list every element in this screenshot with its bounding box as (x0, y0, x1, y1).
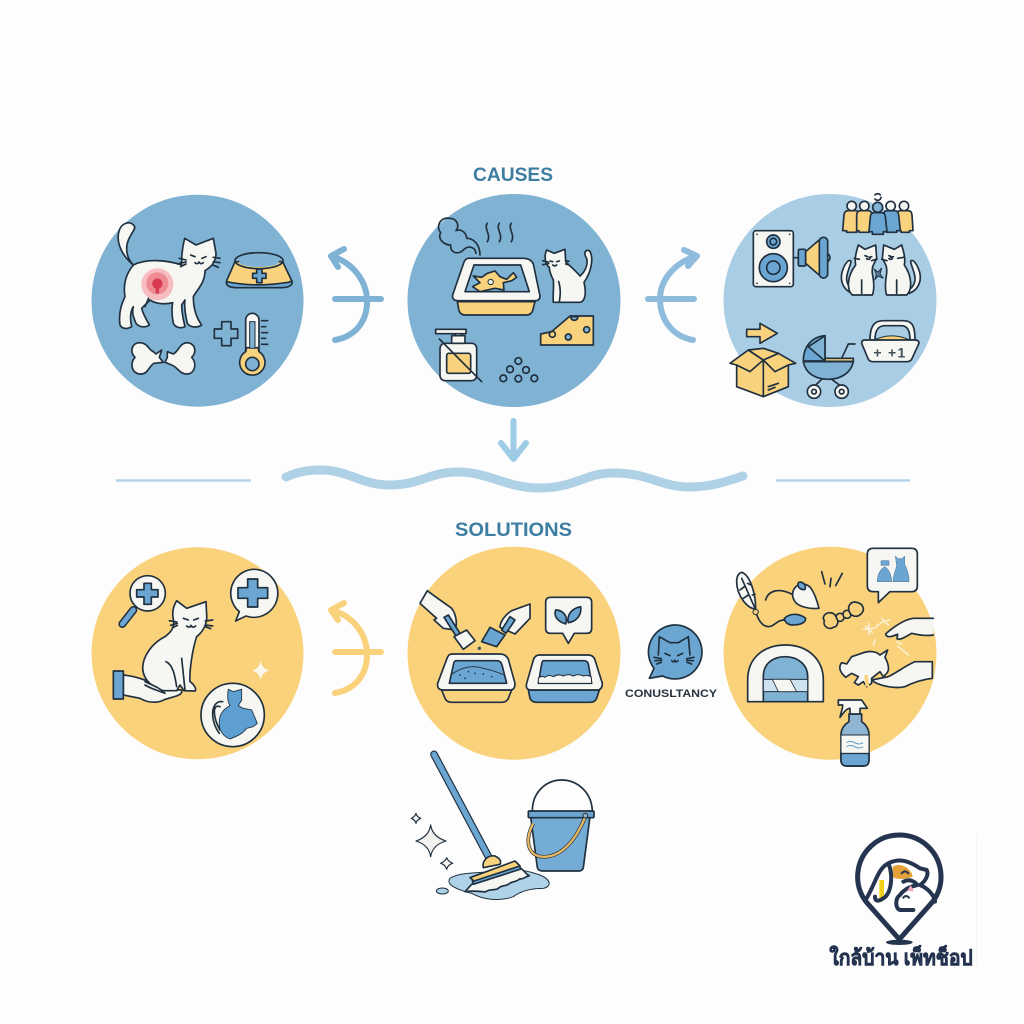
panel: veterinary solutions (92, 547, 304, 759)
logo: pet shop pin (829, 835, 977, 970)
icon: dirty litter box (453, 258, 540, 315)
icon: crowd of people (843, 194, 913, 234)
icon: bucket (528, 780, 594, 871)
icon: white toy mouse (766, 572, 842, 609)
arrow: solutions left (331, 603, 381, 693)
decorative: faint vertical edge (976, 835, 978, 965)
heading: solutions: SOLUTIONS (455, 520, 572, 541)
icon: cat on hand (840, 650, 932, 687)
divider: right line (776, 479, 910, 482)
icon: cheese (541, 316, 593, 345)
icon: speech bubble with leaf (546, 597, 592, 643)
icon: speech bubble with cross (231, 569, 278, 621)
panel: environment solutions (724, 547, 936, 766)
divider: left line (116, 479, 251, 482)
panel: stress causes (724, 194, 936, 407)
icon: speech bubble with cat and person (867, 548, 917, 603)
label: shop name: ใกล้บ้าน เพ็ทช็อป (829, 944, 973, 970)
icon: white cat with pain spot (118, 223, 220, 328)
icon: badge with blue cats (201, 683, 264, 747)
icon: thermometer (240, 313, 268, 375)
icon: sparkles (411, 813, 453, 869)
label: consultancy: CONUSLTANCY (625, 688, 718, 700)
icon: water puddle (436, 870, 549, 900)
icon: left hand and white scoop (420, 591, 475, 649)
icon: cloud toy (823, 602, 863, 628)
panel: medical causes (92, 195, 304, 407)
arrow: down (501, 421, 526, 459)
icon: sparkles and touch lines (863, 618, 908, 655)
icon: cross (214, 322, 238, 346)
icon: bowl with cross (226, 253, 292, 288)
illustration: mop and bucket (411, 754, 594, 900)
icon: cat on hand (113, 601, 213, 702)
icon: dirty blue-filled litter box (438, 654, 515, 702)
icon: covered litter tunnel (748, 645, 823, 702)
icon: broken bone (132, 343, 195, 374)
arrow: causes right (648, 250, 697, 340)
divider: wave (286, 470, 743, 488)
panel: litter box causes (408, 194, 620, 407)
icon: mop (434, 754, 529, 892)
icon: litter grains (476, 647, 483, 659)
icon: extra litter basket: + +1 (873, 344, 907, 360)
icon: feather wand and toy mouse (737, 572, 806, 627)
icon: baby pram (803, 336, 855, 398)
icon: sitting cat (543, 249, 592, 302)
icon: spray bottle (838, 700, 869, 766)
icon: cardboard box (730, 348, 796, 397)
icon: petting hand (886, 618, 933, 639)
icon: extra litter basket (862, 321, 919, 362)
icon: loudspeaker (753, 231, 830, 287)
icon: map pin with dog and cat (858, 835, 941, 945)
icon: crossed out spray bottle (436, 329, 482, 382)
icon: pellets (500, 358, 538, 382)
icon: clean litter box (526, 655, 602, 702)
callout: consultancy (625, 625, 718, 700)
heading: causes: CAUSES (473, 165, 553, 186)
icon: magnifier with cross (122, 576, 165, 624)
icon: smoke and odour (439, 218, 513, 255)
arrow: causes left (331, 249, 381, 340)
icon: two tense cats (841, 245, 920, 295)
icon: arrow right (747, 323, 777, 343)
icon: sparkle (252, 661, 269, 680)
icon: right hand and blue scoop (482, 604, 530, 647)
panel: litter box solutions (408, 547, 620, 760)
icon: cat speech bubble (648, 625, 702, 679)
